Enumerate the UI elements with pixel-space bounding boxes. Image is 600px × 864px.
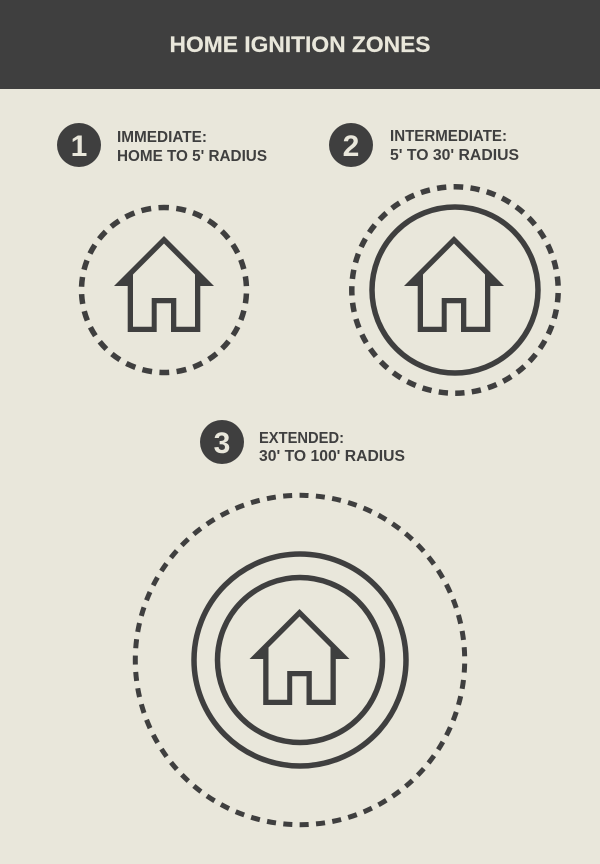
zone 3 diagram <box>131 491 469 829</box>
zone 3 heading: EXTENDED: <box>259 430 344 447</box>
zone 3 heading: 3 <box>214 427 230 460</box>
zone 2 diagram <box>348 183 562 397</box>
zone 2 heading: 2 <box>343 130 359 163</box>
zone 2 heading: INTERMEDIATE: <box>390 128 507 145</box>
zone 3 heading <box>200 420 405 465</box>
title: HOME IGNITION ZONES <box>170 32 430 57</box>
zone 2 heading: 5' TO 30' RADIUS <box>390 147 519 164</box>
zone 1 heading: 1 <box>71 130 87 163</box>
zone 2 heading <box>329 123 519 167</box>
zone 1 diagram <box>82 208 246 372</box>
zone 1 heading: HOME TO 5' RADIUS <box>117 148 267 165</box>
zone 3 heading: 30' TO 100' RADIUS <box>259 448 405 465</box>
zone 1 heading: IMMEDIATE: <box>117 129 207 146</box>
header band <box>0 0 600 89</box>
zone 1 heading <box>57 123 267 167</box>
